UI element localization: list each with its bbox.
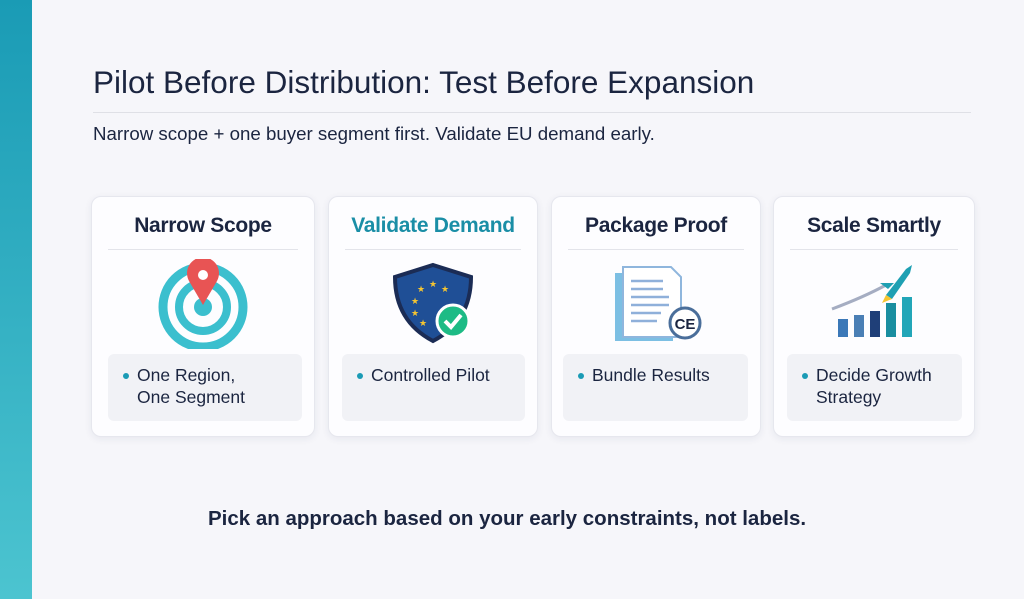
card: Scale Smartly: Scale Smartly — [807, 214, 941, 237]
bullet: Controlled Pilot — [371, 365, 490, 385]
bullet: Bundle Results — [592, 365, 710, 385]
bullet — [787, 354, 962, 421]
bullet: Decide Growth — [816, 365, 932, 385]
icon: EU shield: ★ — [411, 296, 419, 306]
accent bar — [0, 0, 32, 599]
icon: EU shield: ★ — [417, 284, 425, 294]
card: Validate Demand: Validate Demand — [351, 214, 515, 237]
bullet — [563, 354, 748, 421]
bullet: One Region, — [137, 365, 235, 385]
card: Package Proof: Package Proof — [585, 214, 727, 237]
bullet: Strategy — [816, 387, 881, 407]
subtitle: Narrow scope + one buyer segment first. Validate EU demand early. — [93, 123, 655, 144]
icon: document CE — [615, 266, 702, 341]
icon: EU shield — [393, 262, 473, 344]
title: Pilot Before Distribution: Test Before Expansion — [93, 64, 754, 100]
icon: EU shield: ★ — [419, 318, 427, 328]
icon: EU shield: ★ — [441, 284, 449, 294]
card: Scale Smartly — [773, 196, 975, 437]
icon: rocket chart — [832, 265, 912, 337]
icon: document CE: CE — [675, 316, 695, 333]
bullet — [342, 354, 525, 421]
bullet: One Segment — [137, 387, 245, 407]
icon: target pin — [158, 259, 248, 349]
footer note: Pick an approach based on your early constraints, not labels. — [208, 507, 806, 530]
bullet — [108, 354, 302, 421]
card: Package Proof — [551, 196, 761, 437]
icon: EU shield: ★ — [429, 279, 437, 289]
icon: EU shield: ★ — [411, 308, 419, 318]
card: Validate Demand — [328, 196, 538, 437]
card: Narrow Scope: Narrow Scope — [134, 214, 272, 237]
card: Narrow Scope — [91, 196, 315, 437]
